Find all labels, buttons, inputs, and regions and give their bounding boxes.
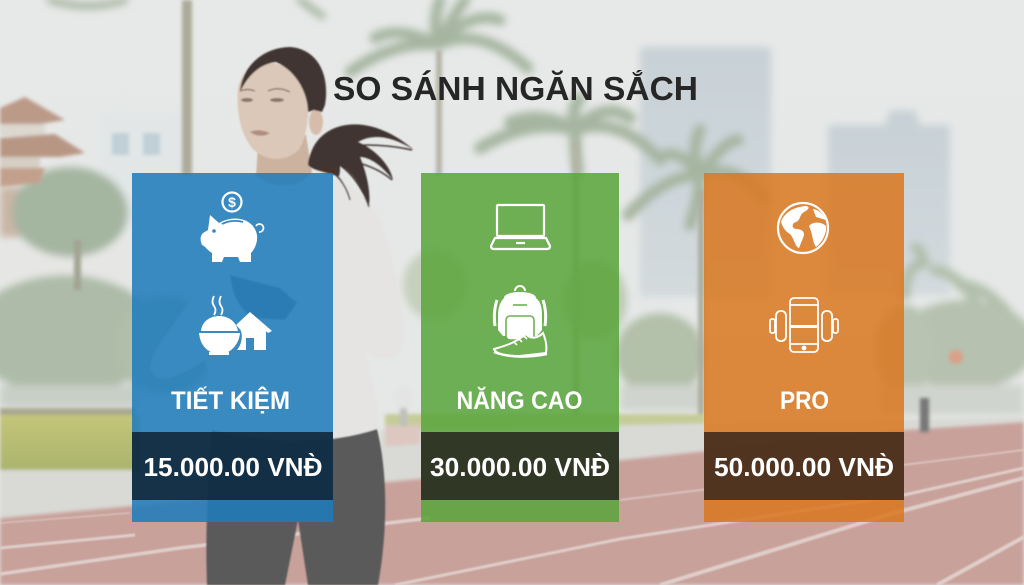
- icon: globe: [778, 203, 828, 253]
- panel: nâng cao: [421, 173, 619, 522]
- runner gloved hand and wristband: [230, 275, 297, 320]
- label: nâng cao: NĂNG CAO: [456, 386, 582, 415]
- runner ponytail: [308, 124, 414, 207]
- label: tiết kiệm: TIẾT KIỆM: [171, 385, 290, 415]
- icon: laptop: [491, 205, 550, 249]
- label: pro: PRO: [780, 387, 829, 415]
- icon: phone with dumbbell: [770, 298, 838, 352]
- price band: tiết kiệm: [132, 432, 333, 500]
- runner hair: [240, 47, 326, 112]
- price: nâng cao: 30.000.00 VNĐ̀: [430, 452, 610, 482]
- runner ear: [309, 109, 323, 135]
- runner face: [238, 62, 309, 159]
- icon: piggy bank with coin: [201, 192, 263, 262]
- runner facial features: [240, 89, 290, 136]
- runner photo: [150, 47, 414, 585]
- title: SO SÁNH NGĂN SẮCH: [333, 70, 698, 107]
- price band: nâng cao: [421, 432, 619, 500]
- price band: pro: [704, 432, 904, 500]
- icon: backpack and running shoe: [494, 286, 547, 357]
- panel: pro: [704, 173, 904, 522]
- icon: rice bowl and house: [199, 296, 272, 355]
- panel: tiết kiệm: [132, 173, 333, 522]
- runner neck: [256, 135, 312, 185]
- price: tiết kiệm: 15.000.00 VNĐ̀: [144, 452, 322, 482]
- icon: piggy bank with coin: $: [228, 194, 236, 210]
- runner shirt and arm: [150, 172, 404, 441]
- runner leggings: [206, 425, 385, 585]
- price: pro: 50.000.00 VNĐ̀: [714, 452, 894, 482]
- palm trees: [50, 0, 1020, 330]
